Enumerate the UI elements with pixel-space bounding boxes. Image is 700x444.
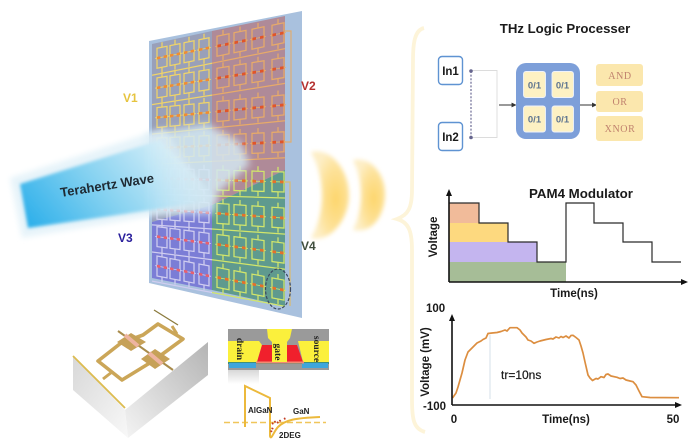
tick 50: 50 xyxy=(667,414,679,426)
level fill purple xyxy=(449,242,537,262)
conduction band xyxy=(245,386,320,437)
axis arrowheads xyxy=(449,314,682,408)
drain metal xyxy=(228,341,262,362)
red barrier xyxy=(257,345,303,362)
label GaN: GaN xyxy=(293,407,310,416)
gold resonator loop xyxy=(98,324,183,380)
voltage trace xyxy=(452,328,679,398)
dotted link xyxy=(470,71,472,137)
y label: Voltage (mV) xyxy=(420,327,432,397)
chip substrate xyxy=(149,11,302,318)
arrow in xyxy=(499,103,516,107)
shadow reflection xyxy=(228,370,259,384)
beam core xyxy=(20,140,220,228)
cell labels xyxy=(528,80,570,126)
cell labels: 0/1 xyxy=(556,80,570,92)
axis arrowheads xyxy=(446,189,688,285)
gate metal xyxy=(267,329,292,362)
outputs: XNOR xyxy=(605,124,635,135)
processor block xyxy=(516,63,580,139)
panel: THz logic processor xyxy=(438,21,643,150)
coded region: lower right green xyxy=(212,170,285,306)
level fill green xyxy=(449,262,566,282)
label AlGaN: AlGaN xyxy=(248,406,273,415)
block left face xyxy=(73,356,128,438)
bias line V2 xyxy=(285,31,291,142)
transistor pad lower xyxy=(141,349,170,369)
outputs: AND xyxy=(608,71,632,82)
PAM4 waveform xyxy=(449,203,681,262)
y label: Voltage xyxy=(428,217,440,257)
axes xyxy=(449,194,684,282)
label gate: gate xyxy=(272,344,282,360)
gate line xyxy=(118,331,173,370)
input box In1 xyxy=(438,56,462,84)
heading: THz Logic Processer xyxy=(500,21,630,36)
blue pad source xyxy=(302,363,328,368)
axes xyxy=(452,319,678,405)
label drain: drain xyxy=(234,338,244,361)
crescent left xyxy=(311,151,349,239)
terahertz beam glow on chip xyxy=(146,124,250,214)
fermi level xyxy=(224,422,326,424)
coded region: upper left xyxy=(152,31,212,222)
label 2DEG: 2DEG xyxy=(279,431,301,440)
arrow out xyxy=(580,103,596,107)
block top face xyxy=(73,310,208,410)
level fill yellow xyxy=(449,223,508,242)
channel layer xyxy=(228,362,329,364)
terahertz beam xyxy=(10,128,220,238)
outputs xyxy=(596,64,643,141)
input bracket xyxy=(471,70,497,138)
label 100: 100 xyxy=(426,303,445,315)
transistor channel lower xyxy=(149,353,162,364)
panel: PAM4 modulator chart xyxy=(428,186,688,300)
label: V3: V3 xyxy=(118,231,133,245)
crescent right xyxy=(353,159,385,231)
coded region: lower left purple xyxy=(152,205,212,290)
edge electrode left xyxy=(73,356,125,408)
coded region: upper right red xyxy=(212,16,285,205)
cell labels: 0/1 xyxy=(528,114,542,126)
transistor pad upper xyxy=(117,333,146,351)
tick 0: 0 xyxy=(451,414,457,426)
memory cells xyxy=(524,72,574,132)
rise time annotation: tr=10ns xyxy=(501,368,541,382)
circuit array xyxy=(152,17,286,307)
input box In1: In1 xyxy=(442,66,459,78)
input box In2: In2 xyxy=(442,132,459,144)
label: Terahertz Wave: Terahertz Wave xyxy=(59,170,155,200)
selected unit cell dashed ellipse xyxy=(266,269,290,309)
label: V2: V2 xyxy=(301,79,316,93)
input nodes xyxy=(469,69,473,139)
source metal xyxy=(298,341,329,362)
bias line V4 xyxy=(285,182,290,306)
beam halo xyxy=(10,126,187,238)
2DEG dots xyxy=(271,418,286,432)
blue pad drain xyxy=(229,363,256,368)
substrate xyxy=(228,329,329,370)
x label: Time(ns) xyxy=(550,288,598,300)
transistor channel upper xyxy=(125,335,138,346)
brace xyxy=(397,28,425,432)
label source: source xyxy=(311,336,321,362)
edge electrode back xyxy=(154,310,178,325)
icon: lens crescents xyxy=(311,151,385,239)
band diagram xyxy=(224,386,326,440)
label -100: -100 xyxy=(423,401,446,413)
resonator stubs xyxy=(103,326,177,379)
label: V1: V1 xyxy=(123,91,138,105)
rise time marker xyxy=(489,335,491,399)
heading: PAM4 Modulator xyxy=(529,186,633,201)
level fill orange xyxy=(449,203,479,223)
label: V4: V4 xyxy=(301,239,316,253)
block right face xyxy=(125,342,208,438)
HEMT cross section xyxy=(228,329,329,384)
cell labels: 0/1 xyxy=(528,80,542,92)
cell labels: 0/1 xyxy=(556,114,570,126)
x label: Time(ns) xyxy=(542,414,590,426)
pink channel strip xyxy=(256,362,304,364)
input box In2 xyxy=(438,122,462,150)
3D unit cell block xyxy=(73,310,208,438)
outputs: OR xyxy=(612,97,628,108)
panel: metasurface chip xyxy=(149,11,302,318)
panel: measured voltage chart xyxy=(420,303,682,426)
